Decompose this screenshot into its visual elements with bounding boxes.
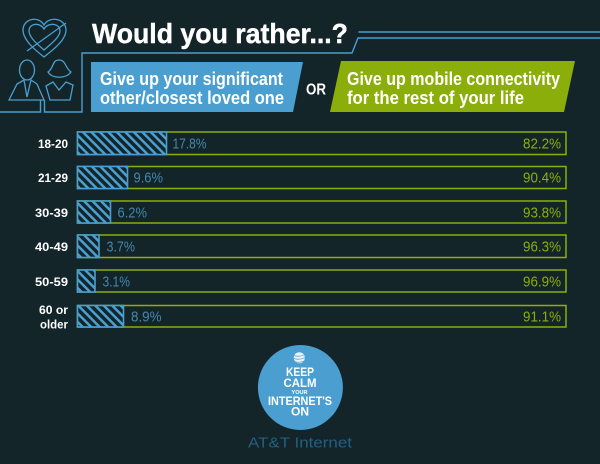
option: give up mobile connectivity: for the rest of your life xyxy=(347,88,524,108)
row: 60 or older: 8.9% xyxy=(131,308,162,326)
badge: keep calm xyxy=(258,345,343,430)
row: 50-59: 96.9% xyxy=(523,274,561,290)
option: give up loved one: other/closest loved one xyxy=(100,88,284,108)
row: 40-49 xyxy=(35,235,566,258)
row: 21-29: 9.6% xyxy=(134,170,163,186)
row: 30-39: 30-39 xyxy=(35,206,68,220)
title: Would you rather...? xyxy=(92,18,348,49)
option: give up loved one: Give up your significant xyxy=(100,69,283,89)
row: 18-20: 18-20 xyxy=(38,137,68,151)
row: 50-59 xyxy=(35,270,566,292)
badge: keep calm: YOUR xyxy=(292,390,308,396)
row: 18-20: 17.8% xyxy=(172,136,206,152)
badge: keep calm: INTERNET'S xyxy=(268,396,332,408)
brand: AT&T Internet: AT&T Internet xyxy=(248,434,353,452)
row: 60 or older: 60 or xyxy=(39,303,68,317)
row: 30-39: 93.8% xyxy=(523,204,561,222)
row: 50-59: 50-59 xyxy=(35,275,68,289)
row: 30-39 xyxy=(35,201,566,223)
row: 21-29 xyxy=(38,166,566,188)
or label: OR xyxy=(306,82,326,98)
row: 40-49: 96.3% xyxy=(523,238,561,256)
row: 50-59: 3.1% xyxy=(102,274,130,290)
option: give up mobile connectivity xyxy=(330,61,575,112)
row: 18-20 xyxy=(38,132,566,154)
badge: keep calm: CALM xyxy=(284,378,316,390)
icon: crossed heart and couple xyxy=(9,19,73,100)
option: give up loved one xyxy=(91,62,303,112)
row: 40-49: 3.7% xyxy=(106,238,135,256)
option: give up mobile connectivity: Give up mobile connectivity xyxy=(347,69,560,89)
row: 60 or older: 91.1% xyxy=(523,308,561,326)
badge: keep calm: KEEP xyxy=(286,367,314,379)
row: 21-29: 21-29 xyxy=(38,171,68,185)
row: 18-20: 82.2% xyxy=(523,136,561,152)
header connector lines xyxy=(0,32,600,112)
row: 30-39: 6.2% xyxy=(118,204,147,222)
row: 60 or older xyxy=(39,303,566,332)
row: 40-49: 40-49 xyxy=(35,240,68,254)
row: 21-29: 90.4% xyxy=(523,170,561,186)
badge: keep calm: ON xyxy=(291,406,309,418)
row: 60 or older: older xyxy=(40,318,68,332)
icon: AT&T globe xyxy=(293,352,306,363)
